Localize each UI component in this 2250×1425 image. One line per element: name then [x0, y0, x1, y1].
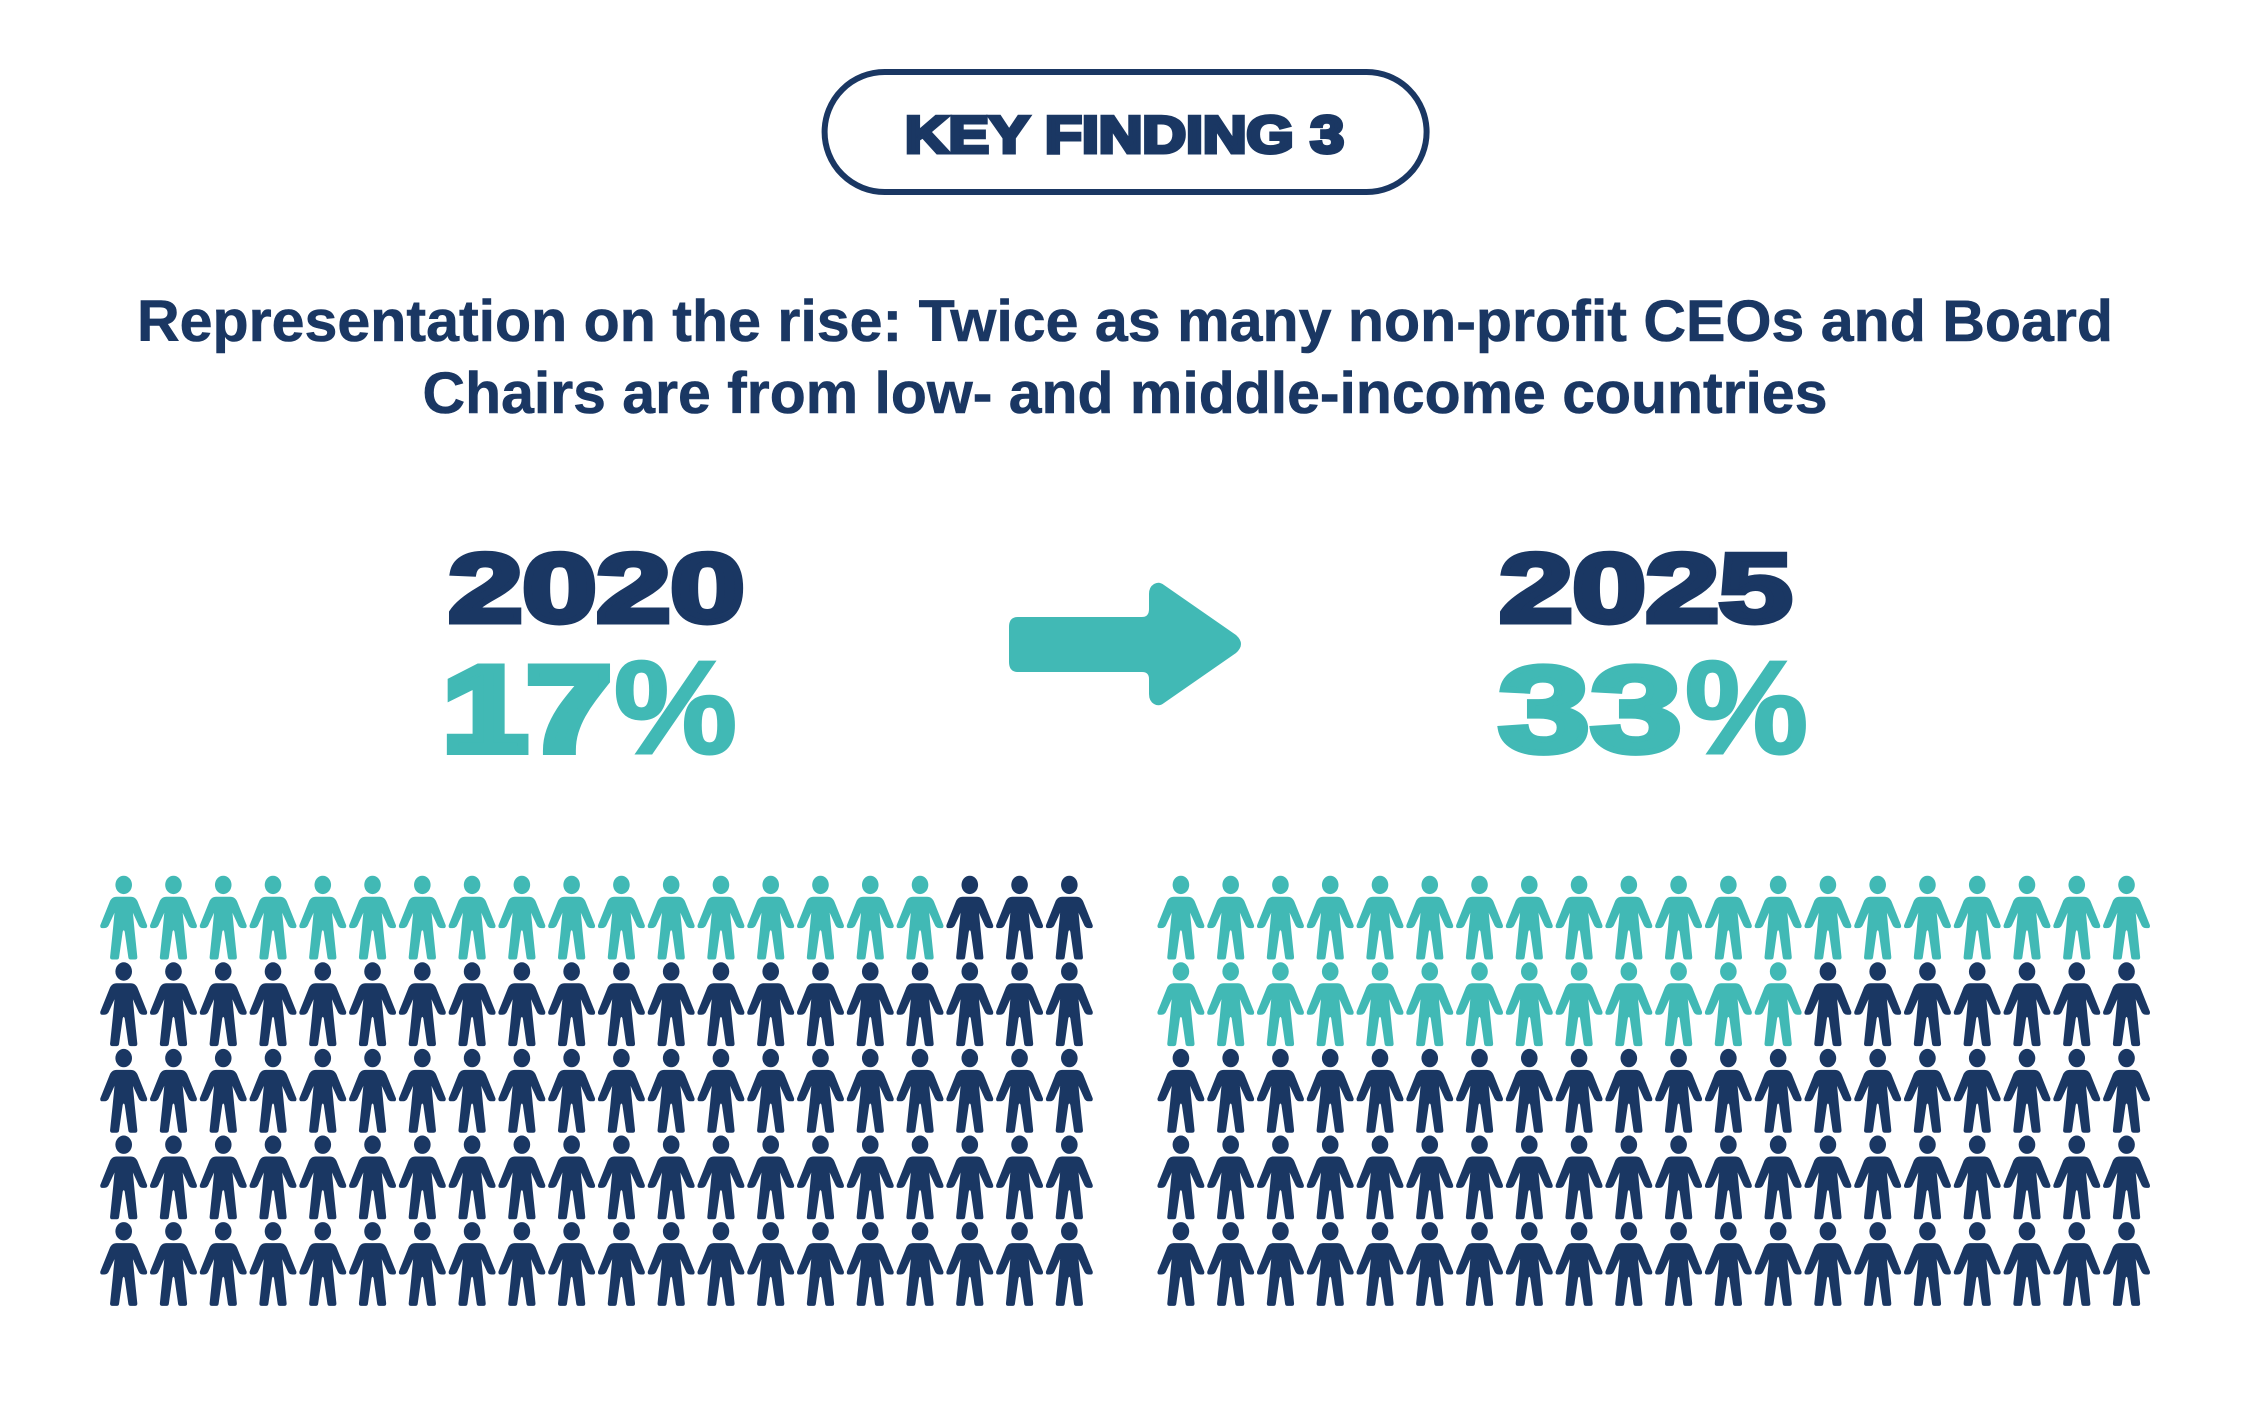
value 33%: 33	[1498, 642, 1682, 778]
stat: 2020	[443, 534, 744, 781]
pictogram: 2020, 17 of 100 highlighted	[100, 876, 1093, 1306]
year 2020: 2020	[448, 534, 744, 642]
arrow	[1009, 583, 1241, 705]
value 17%: %	[614, 634, 737, 781]
rows 3 to 5: navy	[1157, 1049, 2150, 1306]
rows 2 to 5: navy	[100, 962, 1093, 1306]
heading	[137, 289, 2113, 426]
value 33%	[1498, 634, 1808, 781]
badge: key finding 3	[825, 72, 1427, 192]
row 2: 13 teal, 7 navy	[1157, 962, 2150, 1046]
row 1: 20 teal	[1157, 876, 2150, 960]
value 17%: 17	[443, 642, 611, 776]
heading line 1: Representation on the rise: Twice as many non-profit CEOs and Board	[137, 289, 2113, 354]
stat: 2025	[1498, 534, 1808, 781]
badge outline	[825, 72, 1427, 192]
heading line 2: Chairs are from low- and middle-income countries	[422, 361, 1828, 426]
row 1: 17 teal, 3 navy	[100, 876, 1093, 960]
value 17%	[443, 634, 737, 781]
badge label: KEY FINDING 3	[905, 106, 1344, 164]
value 33%: %	[1685, 634, 1808, 781]
pictogram: 2025, 33 of 100 highlighted	[1157, 876, 2150, 1306]
year 2025: 2025	[1500, 534, 1792, 642]
